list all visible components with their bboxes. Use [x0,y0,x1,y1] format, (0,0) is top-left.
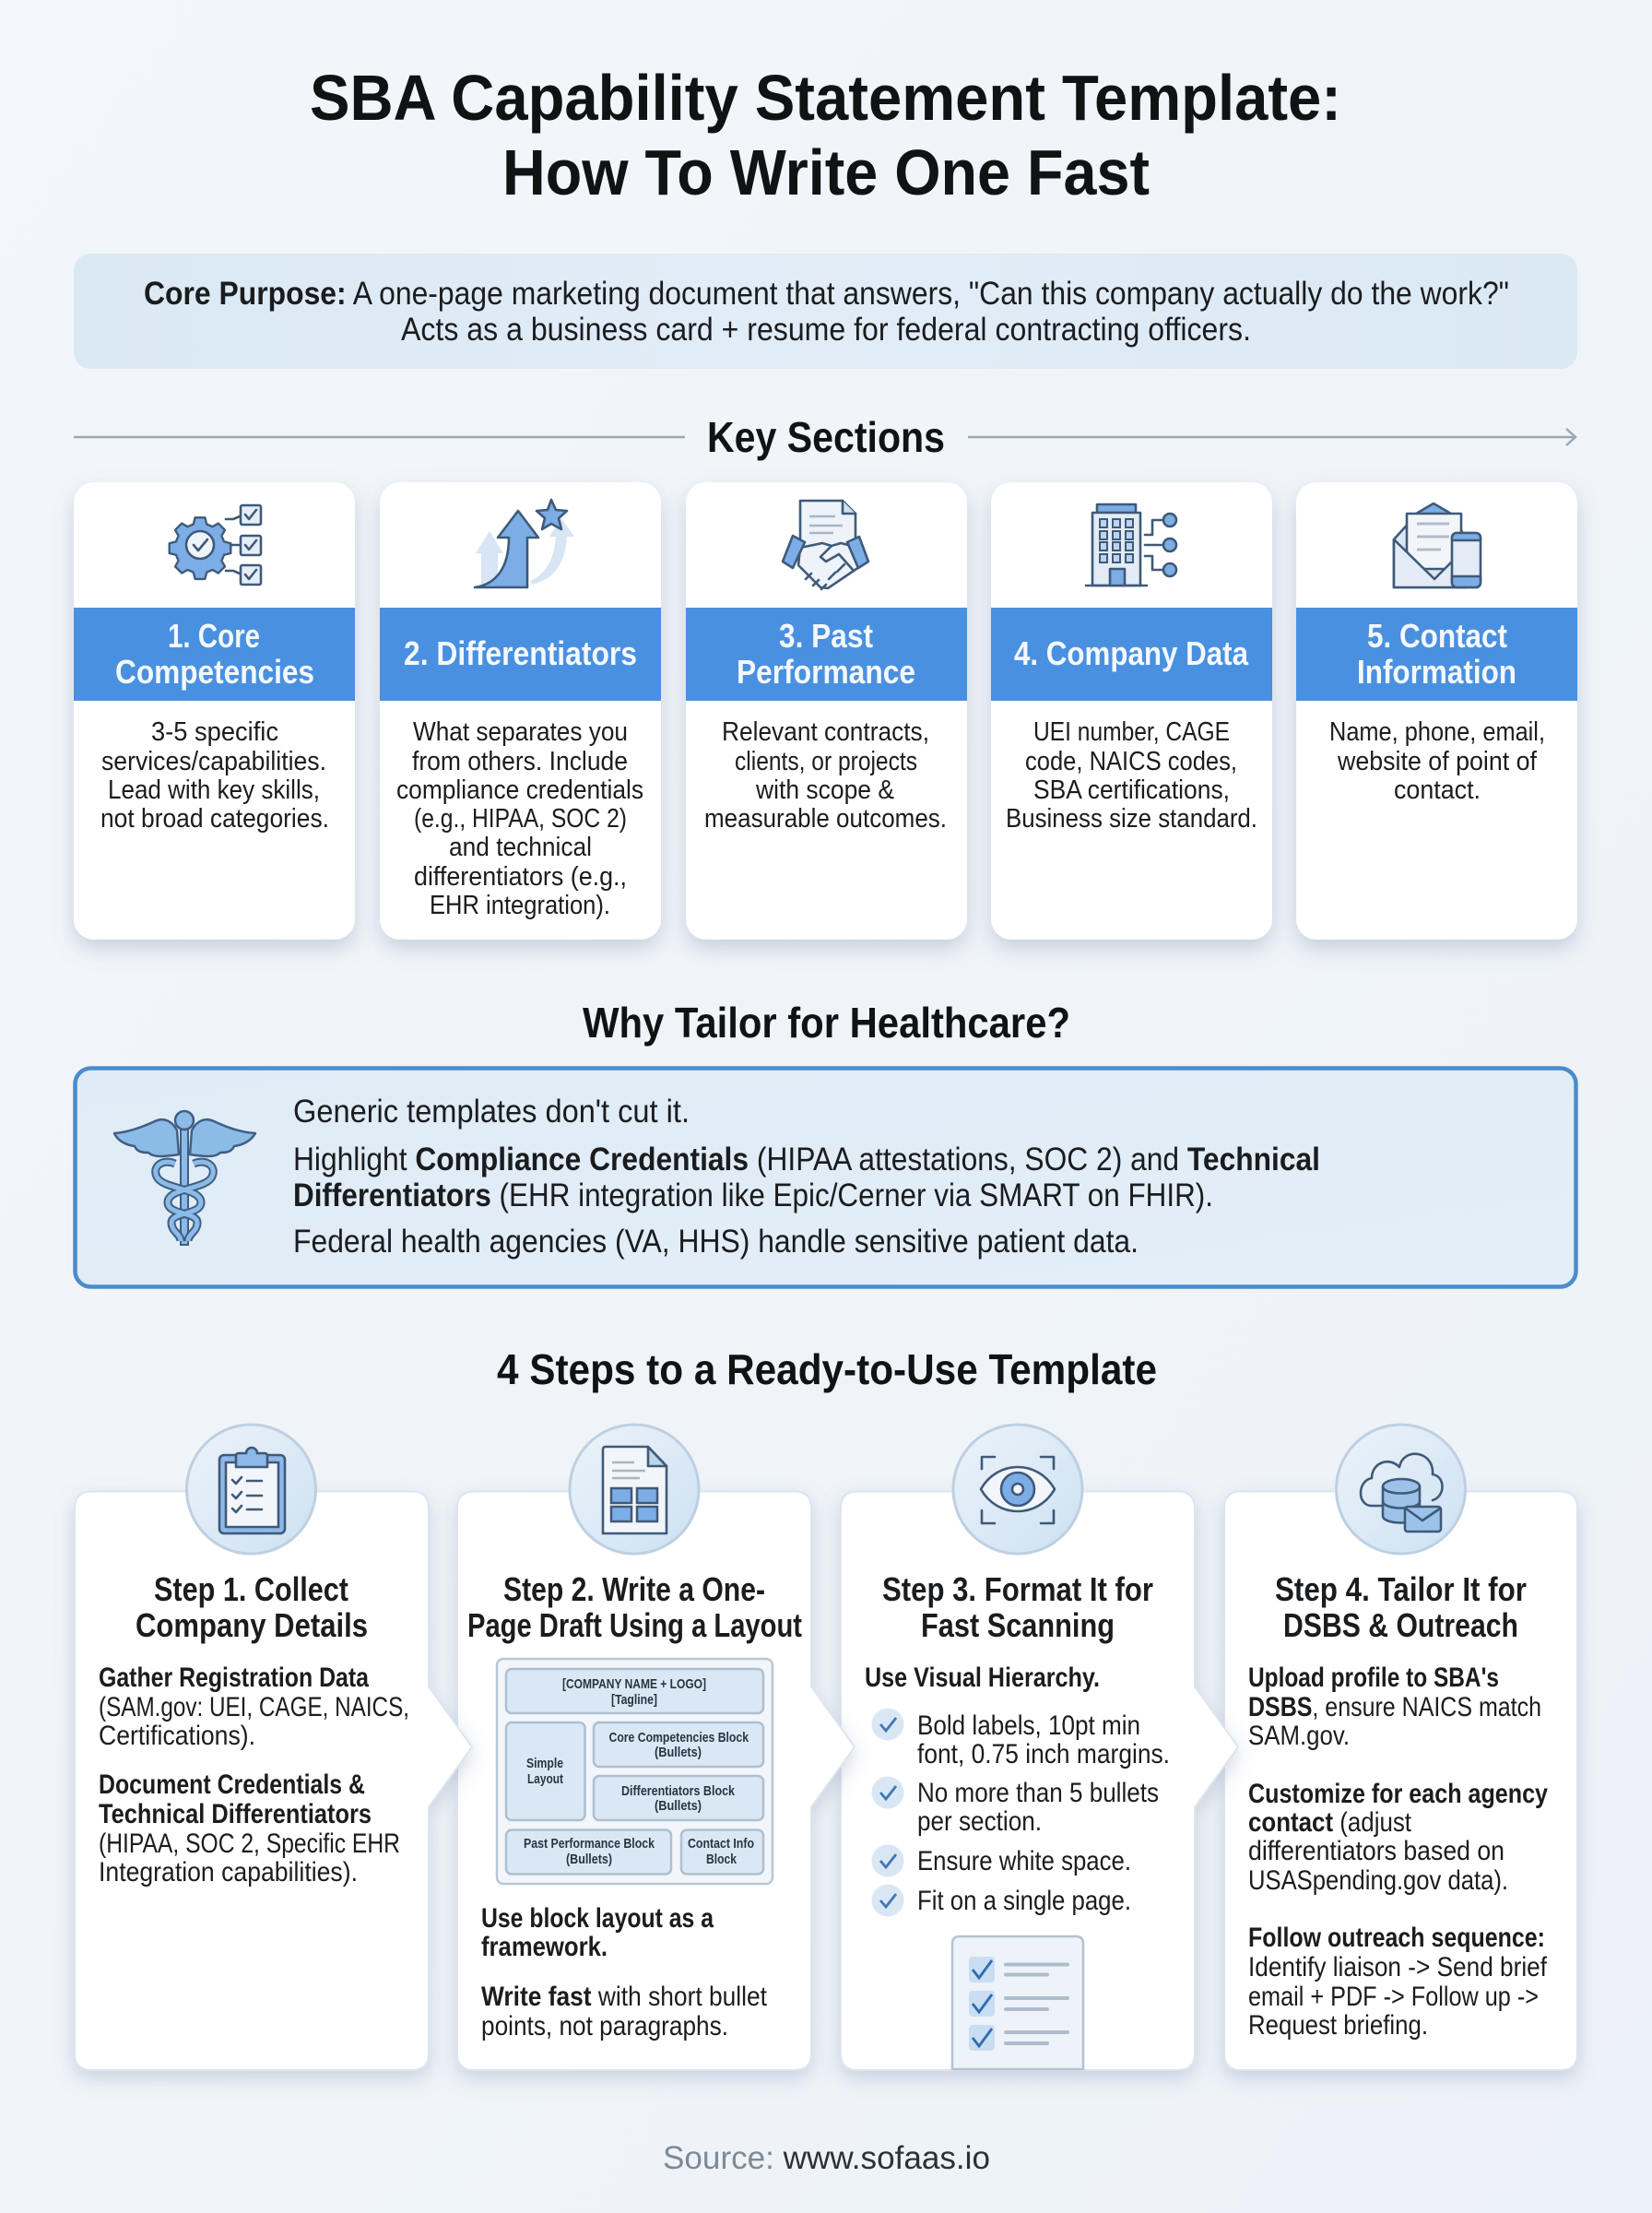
step 3 card: Fast Scanning [921,1606,1115,1644]
step 3 card: Step 3. Format It for [882,1570,1153,1608]
panel: core purpose: Acts as a business card + resume for federal contracting officers. [401,312,1251,348]
step 1 card: Gather Registration Data [99,1663,369,1693]
step 4 card: differentiators based on [1248,1836,1504,1866]
step 2 card [457,1425,855,2070]
checklist bullets: No more than 5 bullets [917,1778,1159,1808]
icon: scanning eye [953,1425,1082,1554]
step 4 card: Step 4. Tailor It for [1275,1570,1527,1608]
step 4 card: contact (adjust [1248,1807,1412,1838]
panel: key section cards [74,482,1577,940]
heading: why tailor for healthcare: Why Tailor for Healthcare? [583,999,1070,1047]
step 4 card: Upload profile to SBA's [1248,1663,1499,1693]
layout diagram: Contact Info [688,1836,754,1852]
card 1: core competencies: services/capabilities. [101,747,326,776]
card 2: differentiators: from others. Include [412,747,628,776]
card 5: contact information: 5. Contact [1367,617,1507,655]
card 5: contact information: website of point of [1337,747,1538,776]
step 4 card: SAM.gov. [1248,1721,1350,1751]
step 4 card: Request briefing. [1248,2010,1428,2041]
step 4 card: email + PDF -> Follow up -> [1248,1982,1539,2012]
title: How To Write One Fast [502,136,1150,208]
icon: handshake and document [783,501,868,589]
card 3: past performance: 3. Past [779,617,873,655]
step 3 card: Use Visual Hierarchy. [865,1663,1100,1693]
card 2: differentiators: 2. Differentiators [404,634,637,672]
card 3: past performance: Relevant contracts, [722,717,929,747]
title: SBA Capability Statement Template: [310,62,1341,134]
layout diagram: Layout [527,1771,563,1787]
step 2 card: framework. [481,1932,608,1962]
card 2: differentiators [380,482,661,940]
step 2 card: Step 2. Write a One- [503,1570,765,1608]
heading: key sections: Key Sections [707,413,945,461]
callout text: Differentiators (EHR integration like Epic/Cerner via SMART on FHIR). [293,1178,1213,1213]
step 2 card: points, not paragraphs. [481,2011,728,2041]
step 3 card [841,1425,1238,2070]
card 1: core competencies: Competencies [115,653,314,691]
step 1 card: Company Details [136,1606,368,1644]
card 2: differentiators: (e.g., HIPAA, SOC 2) [414,804,627,834]
card 4: company data: Business size standard. [1006,804,1257,834]
step 1 card: (HIPAA, SOC 2, Specific EHR [99,1828,400,1859]
callout text: Federal health agencies (VA, HHS) handle sensitive patient data. [293,1224,1139,1260]
layout diagram: (Bullets) [655,1745,702,1760]
step 1 card: Integration capabilities). [99,1857,358,1888]
card 2: differentiators: compliance credentials [396,775,643,805]
step 4 card: USASpending.gov data). [1248,1865,1508,1896]
card 1: core competencies: Lead with key skills, [108,775,320,805]
card 3: past performance [686,482,967,940]
icon: gear with checklist [170,505,261,585]
layout diagram: [Tagline] [611,1692,657,1708]
layout diagram [497,1659,773,1884]
card 3: past performance: clients, or projects [735,747,917,776]
icon: checklist document [952,1936,1083,2069]
callout text: Highlight Compliance Credentials (HIPAA attestations, SOC 2) and Technical [293,1142,1320,1178]
icon: envelope and phone [1394,503,1481,587]
checklist bullets: Fit on a single page. [917,1886,1131,1916]
step 4 card: Identify liaison -> Send brief [1248,1952,1548,1982]
step 2 card: Use block layout as a [481,1903,714,1934]
card 4: company data: code, NAICS codes, [1025,747,1237,776]
card 3: past performance: with scope & [755,775,894,805]
icon: clipboard checklist [186,1425,315,1554]
checklist bullets: font, 0.75 inch margins. [917,1739,1170,1769]
title [310,62,1341,208]
card 2: differentiators: differentiators (e.g., [414,862,627,892]
step 4 card: DSBS & Outreach [1283,1606,1518,1644]
card 5: contact information [1296,482,1577,940]
card 2: differentiators: What separates you [413,717,628,747]
callout text: Generic templates don't cut it. [293,1094,690,1130]
step 4 card [1224,1425,1577,2070]
card 2: differentiators: EHR integration). [430,891,610,920]
heading: 4 steps: 4 Steps to a Ready-to-Use Template [497,1345,1157,1393]
panel: core purpose: Core Purpose: A one-page marketing document that answers, "Can this company actually do the work?" [144,276,1509,312]
step 4 card: Customize for each agency [1248,1779,1548,1809]
step 2 card: Write fast with short bullet [481,1982,768,2012]
card 3: past performance: measurable outcomes. [704,804,947,834]
layout diagram: (Bullets) [566,1852,612,1867]
layout diagram: Core Competencies Block [608,1730,749,1746]
step 1 card: Certifications). [99,1721,255,1751]
card 1: core competencies: 1. Core [168,617,260,655]
icon: caduceus [114,1111,255,1245]
layout diagram: Differentiators Block [621,1783,736,1799]
step 1 card [75,1425,472,2070]
step 1 card: (SAM.gov: UEI, CAGE, NAICS, [99,1692,409,1722]
checklist bullets: Ensure white space. [917,1846,1131,1876]
card 5: contact information: Information [1357,653,1516,691]
layout diagram: [COMPANY NAME + LOGO] [562,1676,706,1692]
icon: rising arrow and star [475,500,574,587]
layout diagram: (Bullets) [655,1798,702,1814]
card 1: core competencies [74,482,355,940]
step 2 card: Page Draft Using a Layout [467,1606,802,1644]
callout text [293,1094,1320,1260]
card 3: past performance: Performance [737,653,915,691]
step 1 card: Technical Differentiators [99,1799,372,1829]
icon: office building with nodes [1086,504,1176,586]
source footer: Source: www.sofaas.io [663,2140,990,2176]
checklist bullets: per section. [917,1806,1042,1837]
layout diagram: Block [706,1852,738,1867]
checklist bullets: Bold labels, 10pt min [917,1710,1140,1741]
step 1 card: Document Credentials & [99,1769,365,1800]
card 5: contact information: Name, phone, email, [1329,717,1545,747]
layout diagram: Simple [526,1756,563,1771]
card 4: company data: 4. Company Data [1014,634,1249,672]
card 5: contact information: contact. [1394,775,1481,805]
icon: cloud database [1337,1425,1466,1554]
layout diagram: Past Performance Block [524,1836,655,1852]
panel: healthcare callout [76,1068,1576,1287]
step 4 card: Follow outreach sequence: [1248,1923,1545,1953]
checklist bullets [872,1708,1170,1916]
heading: key sections [74,413,1575,461]
card 4: company data: UEI number, CAGE [1033,717,1230,747]
card 2: differentiators: and technical [449,833,592,862]
step 1 card: Step 1. Collect [154,1570,348,1608]
icon: layout document [570,1425,699,1554]
panel: steps [75,1425,1577,2070]
card 4: company data: SBA certifications, [1033,775,1230,805]
card 4: company data [991,482,1272,940]
panel: core purpose [74,254,1577,369]
card 1: core competencies: 3-5 specific [151,717,278,747]
card 1: core competencies: not broad categories. [100,804,329,834]
step 4 card: DSBS, ensure NAICS match [1248,1692,1541,1722]
